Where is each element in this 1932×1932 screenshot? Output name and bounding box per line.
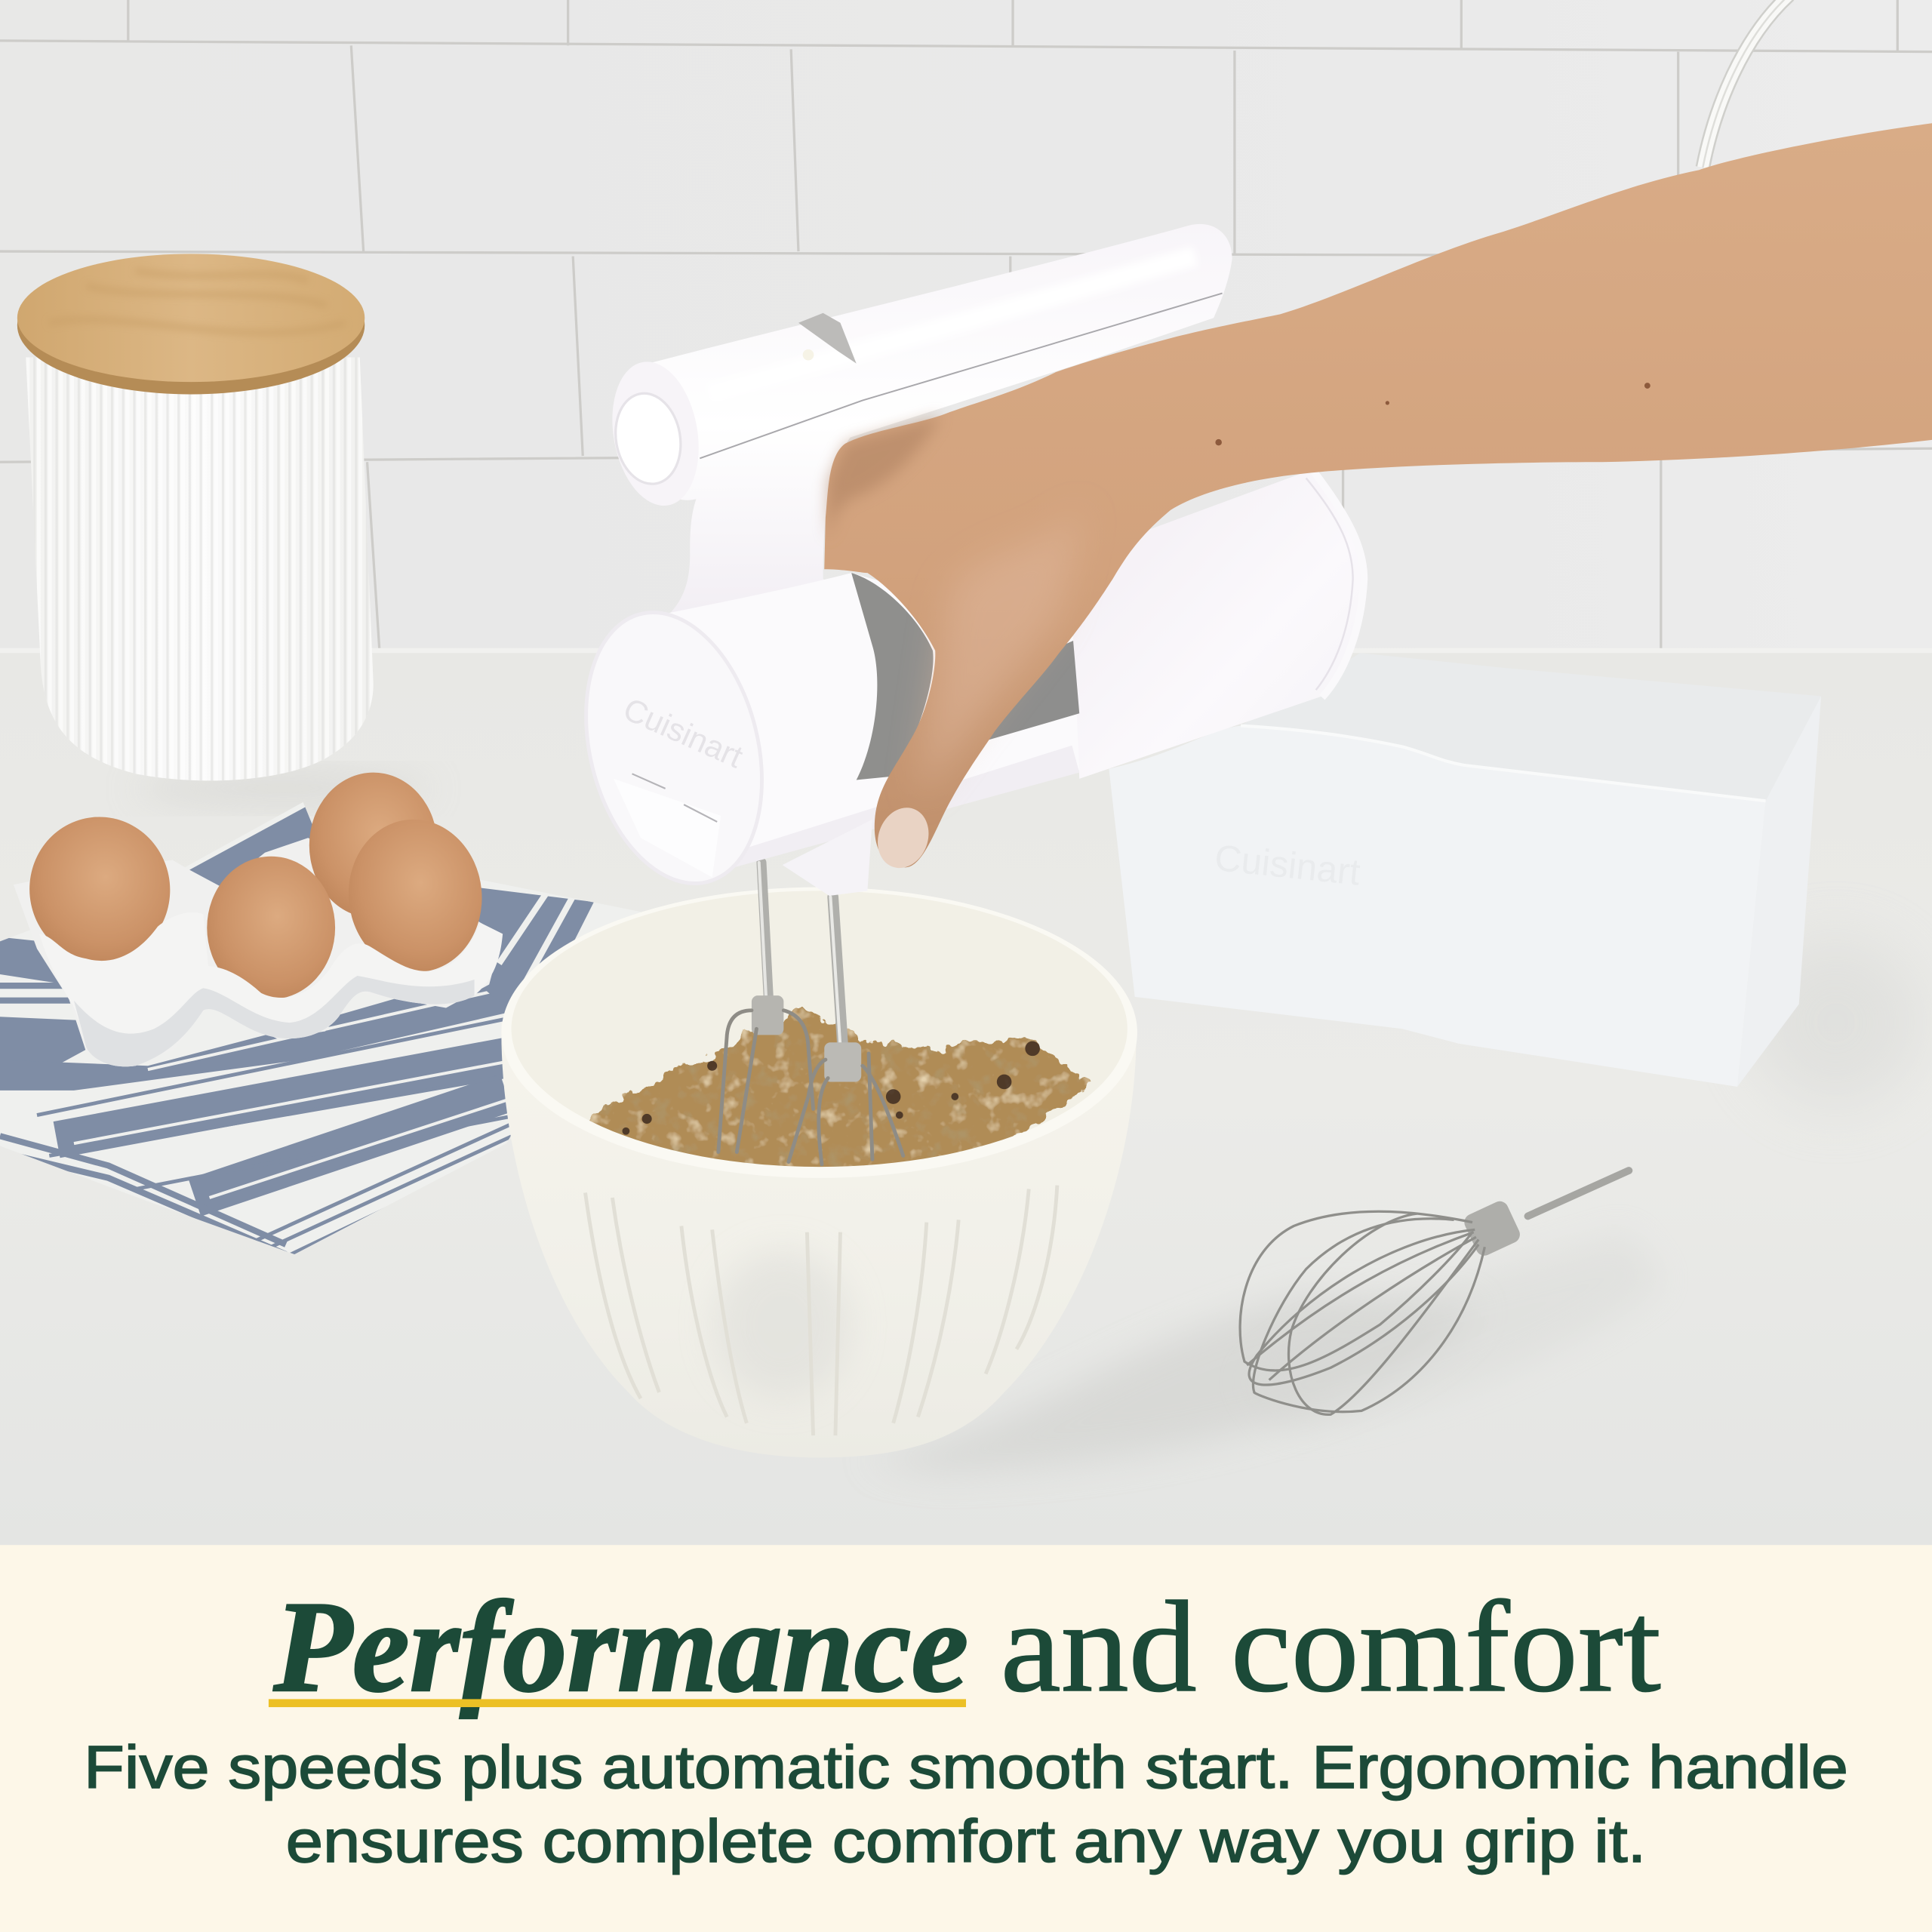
rear housing [1073, 469, 1364, 779]
mixing bowl [501, 888, 1478, 1472]
palm shadow [828, 415, 941, 542]
tray lower shading [74, 976, 475, 1066]
tray front lip [39, 912, 503, 1066]
egg tray with eggs [14, 773, 503, 1066]
egg left [23, 810, 177, 969]
body text: ensures complete comfort any way you grip it. [286, 1807, 1646, 1875]
hand highlight [918, 505, 1084, 801]
grey band rear [961, 641, 1079, 748]
handle [601, 224, 1232, 629]
container logo: Cuisinart [1213, 838, 1362, 894]
cookie dough [589, 1007, 1091, 1167]
grey grip [851, 573, 934, 780]
whisk attachment [1240, 1171, 1663, 1429]
beaters [718, 863, 903, 1164]
motor drum [559, 573, 1079, 902]
hand mixer [559, 224, 1364, 902]
bowl shadow [863, 1294, 1478, 1472]
canister wood lid [17, 254, 365, 394]
hand and arm [824, 123, 1932, 875]
whisk shadow [1244, 1232, 1663, 1429]
canister [17, 254, 431, 806]
beater one [718, 863, 814, 1152]
bowl body [501, 1023, 1137, 1457]
power button cap [601, 355, 709, 512]
skin moles [1215, 383, 1651, 445]
cord [1703, 0, 1789, 168]
caption banner [0, 1545, 1932, 1932]
fingernail [869, 801, 937, 875]
front disc [559, 594, 789, 902]
body text [84, 1734, 1848, 1875]
front logo: Cuisinart [618, 691, 748, 775]
egg middle [207, 857, 335, 999]
tea towel [0, 802, 594, 1254]
beater two [789, 897, 903, 1164]
bowl rim [501, 888, 1137, 1178]
body text: Five speeds plus automatic smooth start. Ergonomic handle [84, 1734, 1848, 1801]
countertop [0, 648, 1932, 1545]
egg right [341, 813, 489, 979]
storage container [1109, 653, 1922, 1109]
heading: Performance [272, 1575, 968, 1719]
egg back [309, 773, 438, 918]
heading: and comfort [1001, 1575, 1661, 1719]
tray back [14, 838, 503, 1066]
spout [783, 820, 872, 896]
heading underline [269, 1699, 966, 1707]
background wall [0, 0, 1932, 653]
heading [272, 1575, 1661, 1719]
speed dial [798, 313, 857, 364]
